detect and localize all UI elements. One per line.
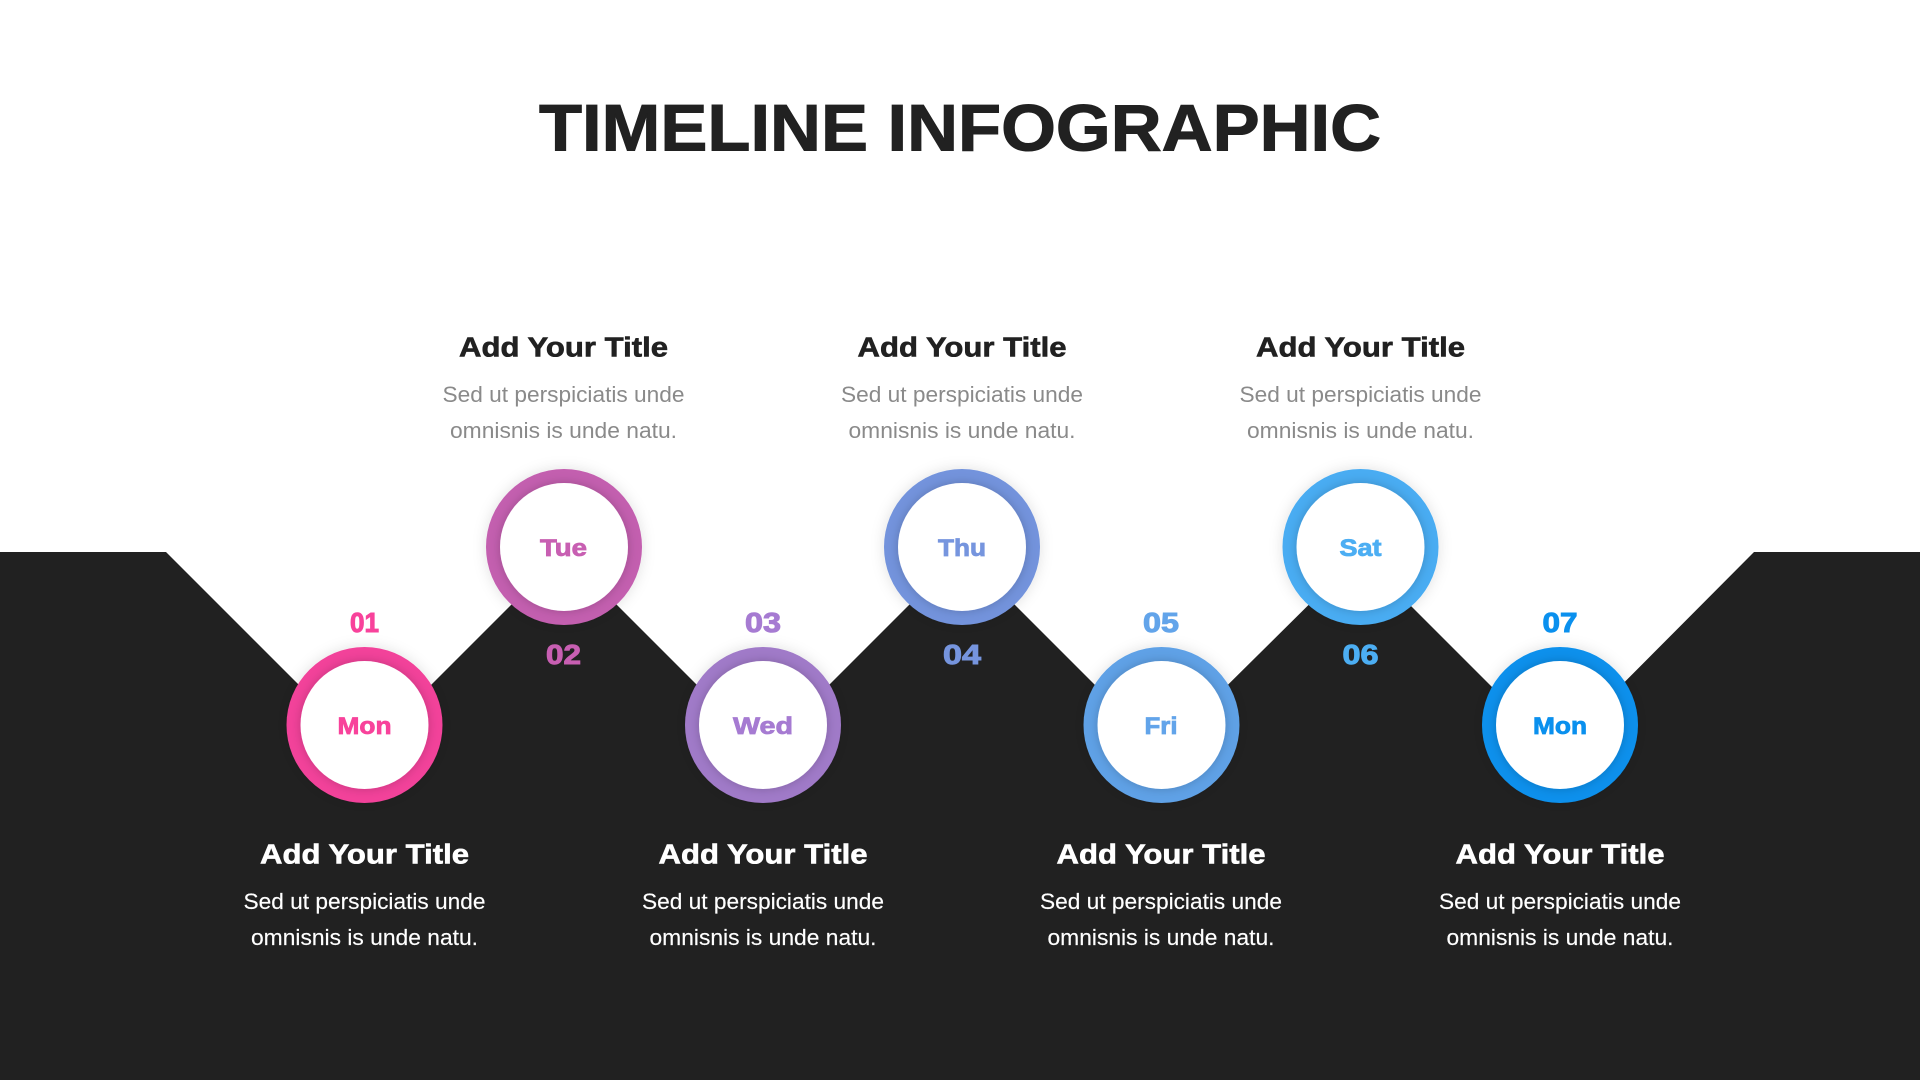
- number 05: 05: [1143, 607, 1179, 638]
- text block 01: [244, 838, 486, 950]
- ring 03: [685, 647, 841, 803]
- step 05: Friday, lower: [1040, 607, 1282, 950]
- step 02: Tuesday, upper: [442, 332, 684, 670]
- text block 03: Add Your Title: [658, 838, 868, 870]
- day label Mon: Mon: [338, 713, 392, 740]
- step 07: Monday, lower: [1439, 607, 1681, 950]
- title: TIMELINE INFOGRAPHIC: [539, 90, 1381, 164]
- text block 05: Sed ut perspiciatis unde: [1040, 889, 1282, 914]
- ring 05: [1084, 647, 1240, 803]
- day label Sat: Sat: [1340, 535, 1382, 562]
- ring 06: [1282, 469, 1438, 625]
- text block 03: Sed ut perspiciatis unde: [642, 889, 884, 914]
- step 01: Monday, lower: [244, 607, 486, 950]
- text block 06: [1240, 332, 1482, 443]
- text block 03: omnisnis is unde natu.: [650, 925, 876, 950]
- text block 02: omnisnis is unde natu.: [450, 418, 677, 443]
- text block 01: Sed ut perspiciatis unde: [244, 889, 486, 914]
- number 06: 06: [1342, 639, 1378, 670]
- step 03: Wednesday, lower: [642, 607, 884, 950]
- number 04: 04: [943, 639, 982, 670]
- number 03: 03: [745, 607, 781, 638]
- text block 02: Sed ut perspiciatis unde: [442, 382, 684, 407]
- number 07: 07: [1542, 607, 1578, 638]
- ring 02: [486, 469, 642, 625]
- day label Wed: Wed: [733, 713, 793, 740]
- text block 06: Sed ut perspiciatis unde: [1240, 382, 1482, 407]
- text block 04: omnisnis is unde natu.: [848, 418, 1076, 443]
- day label Mon: Mon: [1533, 713, 1587, 740]
- ring 07: [1482, 647, 1638, 803]
- text block 07: Add Your Title: [1456, 838, 1664, 870]
- text block 02: [442, 332, 684, 443]
- step 04: Thursday, upper: [841, 332, 1083, 670]
- text block 01: omnisnis is unde natu.: [251, 925, 478, 950]
- dark zigzag background: [0, 552, 1920, 1080]
- text block 02: Add Your Title: [459, 332, 668, 362]
- text block 03: [642, 838, 884, 950]
- text block 01: Add Your Title: [260, 838, 469, 870]
- text block 04: Sed ut perspiciatis unde: [841, 382, 1083, 407]
- number 01: 01: [350, 607, 379, 638]
- step 06: Saturday, upper: [1240, 332, 1482, 670]
- ring 01: [286, 647, 442, 803]
- number 02: 02: [546, 639, 581, 670]
- text block 07: Sed ut perspiciatis unde: [1439, 889, 1681, 914]
- text block 05: Add Your Title: [1056, 838, 1266, 870]
- text block 04: Add Your Title: [858, 332, 1066, 362]
- day label Thu: Thu: [938, 535, 986, 562]
- text block 05: omnisnis is unde natu.: [1048, 925, 1274, 950]
- day label Tue: Tue: [540, 535, 587, 562]
- text block 06: Add Your Title: [1256, 332, 1465, 362]
- text block 07: omnisnis is unde natu.: [1446, 925, 1674, 950]
- ring 04: [884, 469, 1040, 625]
- text block 07: [1439, 838, 1681, 950]
- text block 05: [1040, 838, 1282, 950]
- text block 06: omnisnis is unde natu.: [1247, 418, 1474, 443]
- day label Fri: Fri: [1144, 713, 1178, 740]
- text block 04: [841, 332, 1083, 443]
